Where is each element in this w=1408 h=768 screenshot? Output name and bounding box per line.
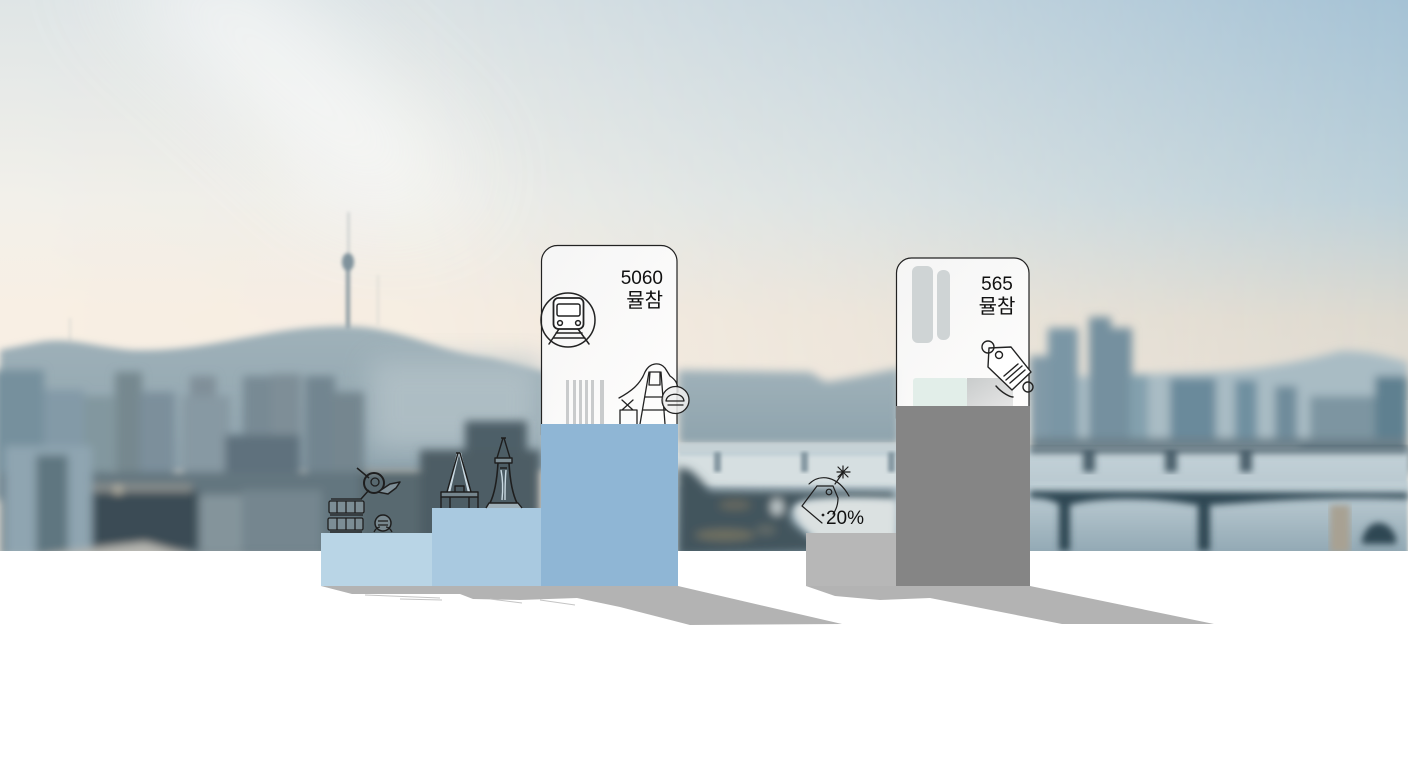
background: blurred city skyline photo	[0, 0, 1408, 551]
card: 5060	[541, 246, 689, 450]
step 2 grey	[896, 406, 1030, 586]
left mountains	[0, 326, 545, 470]
step 1	[321, 533, 432, 586]
label: 5060: 5060	[621, 268, 663, 289]
river	[678, 448, 1408, 558]
label: 565	[979, 274, 1015, 318]
card: 565	[896, 258, 1033, 433]
shadow: blue steps	[321, 586, 842, 625]
icon: tall tower	[486, 438, 522, 508]
left buildings	[0, 370, 540, 560]
icon: train	[541, 293, 595, 347]
step 2	[432, 508, 541, 586]
right side mountains and buildings	[1030, 317, 1408, 474]
left bank and near bridge in the gap	[678, 467, 895, 556]
decorative barcode stripes	[566, 380, 604, 424]
label: 565: 뮬참	[979, 295, 1015, 318]
near bridge	[1030, 491, 1408, 551]
Namsan tower	[69, 212, 379, 342]
decorative pale bars	[912, 266, 1013, 408]
icon: price tag on card	[982, 341, 1033, 397]
label: 20%: 20%	[826, 508, 864, 529]
label: 5060: 뮬참	[626, 289, 663, 312]
step 1 grey	[806, 533, 896, 586]
sun beam	[90, 0, 480, 210]
chart group: rising blue steps	[321, 246, 842, 625]
shadow: grey steps	[806, 586, 1214, 624]
label: 5060	[621, 268, 663, 312]
chart group: grey discount steps	[802, 258, 1214, 624]
icon: stacked carriages and wrench	[328, 468, 400, 532]
icon: small tower	[441, 453, 478, 508]
icon: discount tag	[802, 466, 850, 523]
mid mountains behind the gap	[678, 368, 900, 445]
icon: ladder, mountain and helmet	[619, 364, 689, 424]
left haze	[370, 360, 540, 450]
white floor	[0, 551, 1408, 768]
label: 565: 565	[981, 274, 1013, 295]
bright water patch	[795, 499, 896, 551]
step 3	[541, 424, 678, 586]
far bridge	[714, 452, 895, 472]
